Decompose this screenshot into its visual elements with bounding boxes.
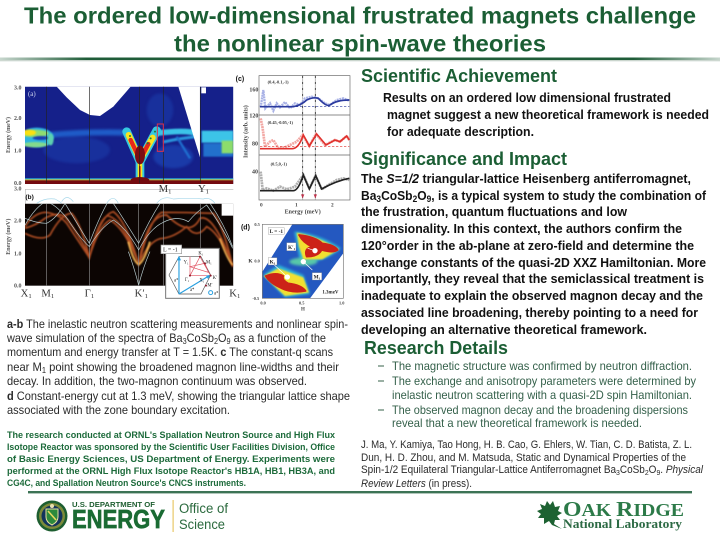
inset: Brillouin zone diagram: a* — [214, 291, 219, 296]
panel b: spin-wave simulation: Y — [198, 184, 206, 195]
logo: US Department of Energy Office of Science: Office of — [179, 501, 228, 516]
reference citation: CoSb — [620, 464, 645, 476]
reference citation — [361, 439, 704, 490]
panel b: spin-wave simulation: X — [21, 289, 28, 300]
caption text: CoSb — [187, 331, 214, 345]
panel a: neutron scattering heat map: Energy (meV) — [5, 117, 12, 153]
text: significance and impact: associated line broadening, thereby pointing to a need for — [361, 305, 698, 320]
caption text: decay. In addition, the two-magnon continuum was observed. — [7, 374, 307, 388]
panel d: constant-energy cut: M₁ — [314, 274, 321, 280]
caption text: 2 — [214, 337, 219, 346]
panel a: neutron scattering heat map: 3.0 — [14, 85, 21, 91]
logo: US Department of Energy Office of Science: Science — [179, 517, 225, 532]
icon: oak leaf — [537, 501, 562, 529]
panel a: neutron scattering heat map: 0.0 — [14, 181, 21, 187]
logo: US Department of Energy Office of Science: U.S. DEPARTMENT OF — [72, 502, 156, 509]
panel d: constant-energy cut: L = -1 — [270, 229, 283, 235]
text: scientific achievement: for adequate description. — [387, 124, 534, 139]
reference citation: Review Letters (in press). — [361, 478, 472, 490]
caption text: wave simulation of the spectra of Ba — [7, 331, 200, 345]
text: significance and impact: 2 — [413, 194, 417, 204]
funding acknowledgement: of Basic Energy Sciences, US Department of Energy. Experiments were — [7, 454, 335, 465]
logo: Oak Ridge National Laboratory: National Laboratory — [563, 517, 683, 531]
panel b: spin-wave simulation: 3.0 — [14, 187, 21, 193]
panel d: constant-energy cut: 1.0 — [339, 301, 344, 306]
text: significance and impact: importantly, they reveal that the semiclassical treatment is — [361, 271, 704, 286]
caption text: 3 — [183, 337, 187, 346]
text: significance and impact: developing an alternative theoretical framework. — [361, 322, 647, 337]
reference citation: 9 — [656, 468, 660, 477]
text: significance and impact: The S=1/2 triangular-lattice Heisenberg antiferromagnet, — [361, 171, 691, 186]
reference citation: Spin-1/2 Equilateral Triangular-Lattice Antiferromagnet Ba — [361, 464, 637, 476]
panel d: constant-energy cut: 1.3meV — [322, 290, 339, 295]
panel b: spin-wave simulation: 1 — [28, 293, 32, 300]
logo: Oak Ridge National Laboratory — [537, 497, 684, 531]
caption text: near M — [7, 360, 44, 374]
caption text: 1 — [42, 366, 47, 375]
panel a: neutron scattering heat map: (a) — [28, 90, 36, 98]
panel b: spin-wave simulation: 1 — [206, 188, 209, 195]
reference citation: 2 — [645, 468, 649, 477]
panel c: constant-q scans: (0.5,0,-1) — [271, 162, 287, 167]
caption text: d Constant-energy cut at 1.3 meV, showing the triangular lattice shape — [7, 389, 350, 403]
panel c: constant-q scans: 0 — [260, 203, 263, 209]
panel b: spin-wave simulation: K — [229, 289, 237, 300]
inset: Brillouin zone diagram: X₁ — [199, 279, 205, 284]
panel c: constant-q scans: (0.45,-0.05,-1) — [268, 120, 293, 125]
panel a: neutron scattering heat map: 1.0 — [14, 149, 21, 155]
panel a: neutron scattering heat map: 2.0 — [14, 116, 21, 122]
text: significance and impact: , is a typical system to study the combination of — [431, 188, 707, 203]
text: significance and impact: CoSb — [381, 188, 413, 203]
panel c: constant-q scans: (0.4,-0.1,-1) — [268, 79, 289, 84]
text: scientific achievement: Results on an ordered low dimensional frustrated — [383, 90, 671, 105]
reference citation: 3 — [616, 468, 620, 477]
panel d: constant-energy cut: 0.5 — [254, 222, 260, 227]
inset: Brillouin zone diagram: Γ₁ — [185, 278, 190, 283]
title: The ordered low-dimensional frustrated magnets challenge — [24, 2, 696, 28]
logo: US Department of Energy Office of Science: ENERGY — [72, 504, 165, 534]
funding acknowledgement — [7, 430, 336, 489]
inset: Brillouin zone diagram: a* — [190, 288, 195, 293]
panel b: spin-wave simulation: 1 — [51, 293, 54, 300]
caption text: associated with the zone boundary excitation. — [7, 403, 230, 417]
text: significance and impact: 120°order in the ab-plane at zero-field and determine the — [361, 238, 694, 253]
panel b: spin-wave simulation: M — [41, 289, 51, 300]
logo: US Department of Energy Office of Science — [36, 500, 228, 534]
panel a: neutron scattering heat map — [5, 85, 233, 187]
caption text: a-b The inelastic neutron scattering measurements and nonlinear spin- — [7, 317, 348, 331]
title: the nonlinear spin-wave theories — [174, 30, 546, 56]
reference citation: . — [660, 464, 666, 476]
caption text: 9 — [227, 337, 231, 346]
panel d: constant-energy cut: K — [248, 259, 253, 265]
panel c: constant-q scans: 40 — [252, 169, 258, 175]
funding acknowledgement: Isotope Reactor was sponsored by the Scientific User Facilities Division, Office — [7, 442, 335, 453]
panel c: constant-q scans: Intensity (arb. units) — [243, 105, 250, 158]
panel d: constant-energy cut: 0.0 — [254, 259, 260, 264]
panel b: spin-wave simulation: Γ — [85, 289, 91, 300]
panel c: constant-q scans: 80 — [252, 141, 258, 147]
reference citation: O — [649, 464, 656, 476]
funding acknowledgement: performed at the ORNL High Flux Isotope Reactor's HB1A, HB1, HB3A, and — [7, 466, 335, 477]
text: significance and impact: 9 — [427, 194, 431, 204]
inset: Brillouin zone diagram: a* — [174, 279, 179, 284]
panel d: constant-energy cut: (d) — [241, 224, 250, 231]
panel d: constant-energy cut: 0.5 — [299, 301, 304, 306]
text: significance and impact: the frustration, quantum fluctuations and low — [361, 204, 628, 219]
panel b: spin-wave simulation: Energy (meV) — [5, 219, 12, 255]
caption text: as a function of the — [231, 331, 326, 345]
panel b: spin-wave simulation: 1 — [145, 293, 148, 300]
list: research details: The observed magnon decay and the broadening dispersions — [392, 403, 688, 417]
logo: Oak Ridge National Laboratory: OAK RIDGE — [563, 497, 684, 521]
list: research details: The exchange and anisotropy parameters were determined by — [392, 374, 696, 388]
caption text — [6, 317, 350, 417]
panel c: constant-q scans — [236, 76, 350, 215]
panel b: spin-wave simulation: (b) — [25, 194, 34, 201]
inset: Brillouin zone diagram: K′ — [213, 276, 217, 281]
inset: Brillouin zone diagram: M₁ — [206, 261, 212, 266]
inset: Brillouin zone diagram: L = -1 — [163, 247, 178, 253]
text: significance and impact: inadequate to explain the observed magnon decay and the — [361, 288, 703, 303]
inset: Brillouin zone diagram — [161, 245, 219, 298]
list: research details — [378, 359, 696, 430]
list: research details: The magnetic structure was confirmed by neutron diffraction. — [392, 359, 692, 373]
caption text: momentum and energy transfer at T = 1.5K. c The constant-q scans — [7, 345, 333, 359]
text: significance and impact: 3 — [376, 194, 381, 204]
caption text: O — [218, 331, 227, 345]
reference citation: Dun, H. D. Zhou, and M. Matsuda, Static and Dynamical Properties of the — [361, 452, 686, 464]
panel b: spin-wave simulation: 0.0 — [14, 283, 21, 289]
panel d: constant-energy cut — [241, 222, 344, 313]
panel b: spin-wave simulation: 1 — [91, 293, 94, 300]
panel b: spin-wave simulation: K′ — [135, 289, 145, 300]
panel b: spin-wave simulation: 1.0 — [14, 251, 21, 257]
heading: significance and impact: Significance and Impact — [361, 149, 567, 169]
list: research details: inelastic neutron scattering with a quasi-2D spin Hamiltonian. — [392, 388, 692, 402]
heading: research details: Research Details — [364, 338, 508, 358]
text: significance and impact: Ba — [361, 188, 378, 203]
text: significance and impact: dimensionality. In this context, the authors confirm the — [361, 221, 682, 236]
panel d: constant-energy cut: 0.0 — [260, 301, 266, 306]
list: research details: reveal that a new theoretical framework is needed. — [392, 416, 642, 430]
panel d: constant-energy cut: K₁ — [270, 259, 276, 265]
funding acknowledgement: The research conducted at ORNL's Spallation Neutron Source and High Flux — [7, 430, 336, 441]
panel d: constant-energy cut: -0.5 — [252, 296, 259, 301]
panel d: constant-energy cut: K′₁ — [288, 245, 296, 251]
panel b: spin-wave simulation — [5, 184, 240, 300]
panel d: constant-energy cut: H — [301, 308, 305, 313]
inset: Brillouin zone diagram: Y₁ — [184, 261, 189, 266]
panel c: constant-q scans: 160 — [249, 88, 258, 94]
text: significance and impact: O — [417, 188, 427, 203]
text: scientific achievement — [383, 90, 709, 139]
panel c: constant-q scans: 120 — [249, 113, 258, 119]
heading: scientific achievement: Scientific Achievement — [361, 66, 557, 86]
text: scientific achievement: magnet suggest a new theoretical framework is needed — [387, 107, 709, 122]
panel b: spin-wave simulation: 1 — [168, 188, 171, 195]
panel b: spin-wave simulation: 1 — [237, 293, 240, 300]
panel b: spin-wave simulation: 2.0 — [14, 219, 21, 225]
icon: DOE seal — [36, 500, 68, 532]
panel c: constant-q scans: 1 — [295, 203, 298, 209]
text: significance and impact — [361, 171, 707, 337]
panel c: constant-q scans: Energy (meV) — [285, 208, 321, 215]
panel b: spin-wave simulation: M — [159, 184, 168, 195]
inset: Brillouin zone diagram: K₁ — [198, 251, 204, 256]
panel c: constant-q scans: (c) — [236, 76, 244, 83]
panel c: constant-q scans: 2 — [331, 203, 334, 209]
text: significance and impact: exchange constants of the quasi-2D XXZ Hamiltonian. More — [361, 255, 706, 270]
inset: Brillouin zone diagram: M′ — [207, 283, 212, 288]
title — [24, 2, 696, 56]
reference citation: Physical — [666, 464, 704, 476]
caption text: point showing the broadened magnon line-widths and their — [46, 360, 339, 374]
funding acknowledgement: CG4C, and Spallation Neutron Source's CNCS instruments. — [7, 478, 246, 489]
